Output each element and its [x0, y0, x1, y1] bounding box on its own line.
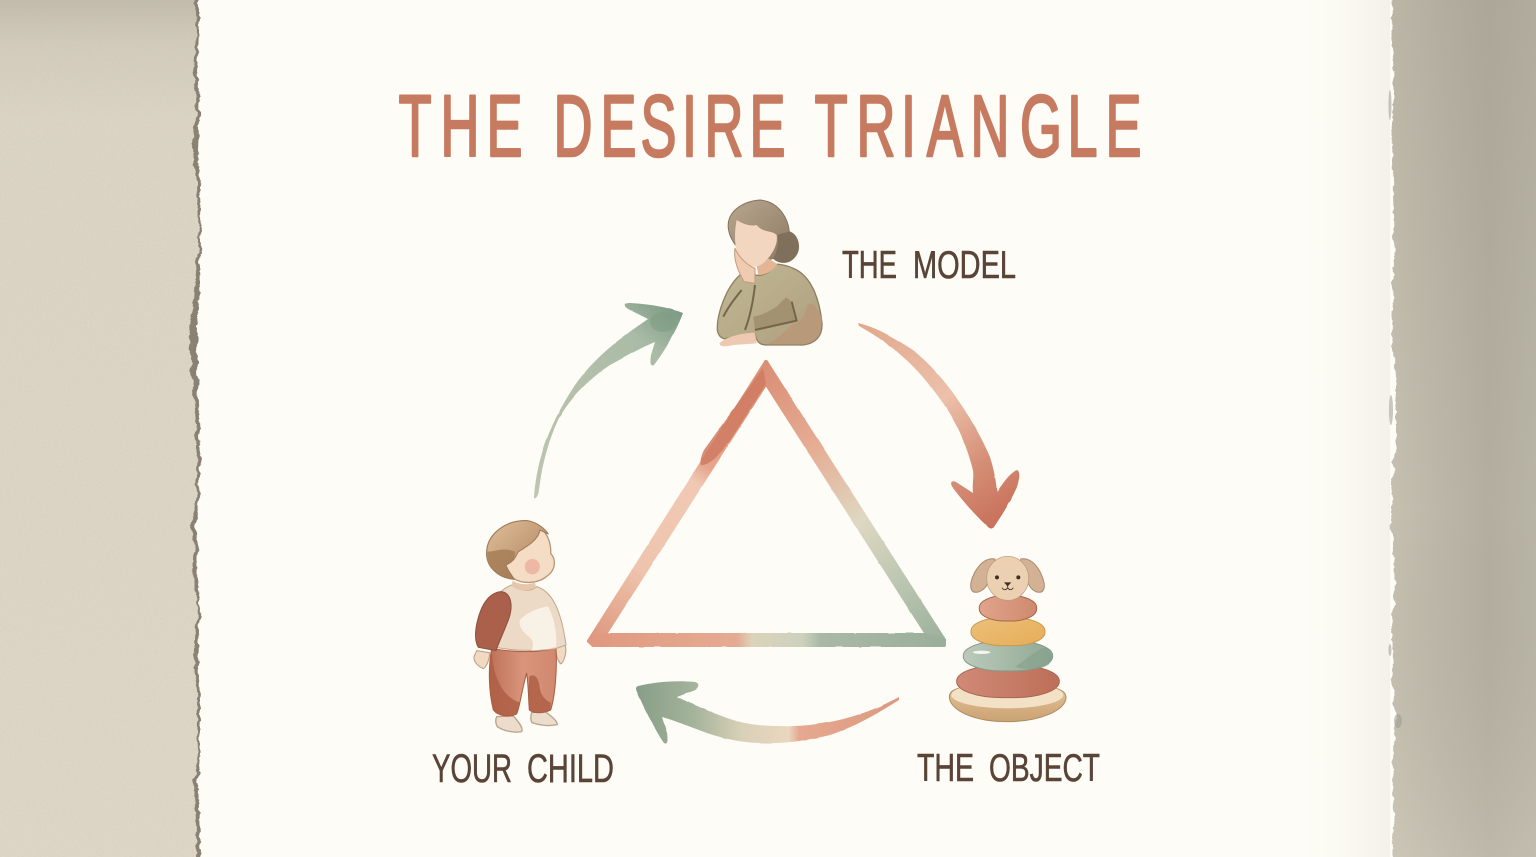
figure: your child [474, 521, 566, 732]
title: THE [399, 78, 522, 175]
model sweater patches [723, 285, 822, 344]
dog face [995, 575, 1020, 590]
arrow: child to model [534, 303, 683, 498]
child cheek [525, 559, 540, 574]
child sweater [492, 585, 566, 650]
model bun shadow [773, 232, 799, 262]
model lower hand [719, 333, 757, 346]
ring highlight [973, 651, 990, 654]
paper sheet [196, 0, 1396, 857]
label: the object [917, 747, 1100, 790]
dark wash on left side [700, 368, 766, 465]
toy base [949, 685, 1066, 722]
label: the object: THE [917, 747, 974, 790]
child hands [474, 645, 566, 669]
green ring [963, 641, 1053, 671]
figure: the model [717, 200, 822, 346]
central triangle [589, 362, 944, 645]
child head [487, 521, 554, 582]
model hand on cheek [735, 248, 755, 283]
dog head [987, 556, 1029, 600]
figure: the object [949, 556, 1066, 722]
yellow ring [971, 618, 1045, 646]
child hair shadow [487, 549, 515, 579]
top ring [979, 596, 1037, 621]
label: the object: OBJECT [989, 747, 1100, 790]
title [399, 78, 1142, 175]
child hair [487, 521, 548, 579]
label: your child: CHILD [527, 747, 614, 791]
model hair [728, 200, 799, 262]
title: DESIRE [553, 78, 785, 175]
model sweater [717, 264, 822, 345]
label: the model: MODEL [913, 244, 1016, 287]
model face [735, 220, 777, 267]
model neck [757, 258, 777, 275]
label: the model [842, 244, 1016, 287]
title: TRIANGLE [815, 78, 1142, 175]
arrow: model to object [858, 323, 1019, 529]
dog ears [971, 559, 1044, 592]
child pants [489, 648, 556, 716]
child shoes [496, 711, 557, 732]
label: your child: YOUR [432, 747, 512, 791]
child sweater highlight [520, 607, 556, 650]
child pants shading [490, 650, 551, 716]
label: your child [432, 747, 614, 791]
child neck [512, 581, 536, 590]
red ring [957, 665, 1059, 698]
label: the model: THE [842, 244, 897, 287]
torn edge shadow [189, 0, 215, 857]
child sleeve [476, 592, 511, 651]
toy base top [951, 682, 1063, 708]
arrow: object to child [636, 681, 899, 743]
right torn edge marks [1388, 90, 1402, 728]
green ring shade [1015, 648, 1051, 669]
